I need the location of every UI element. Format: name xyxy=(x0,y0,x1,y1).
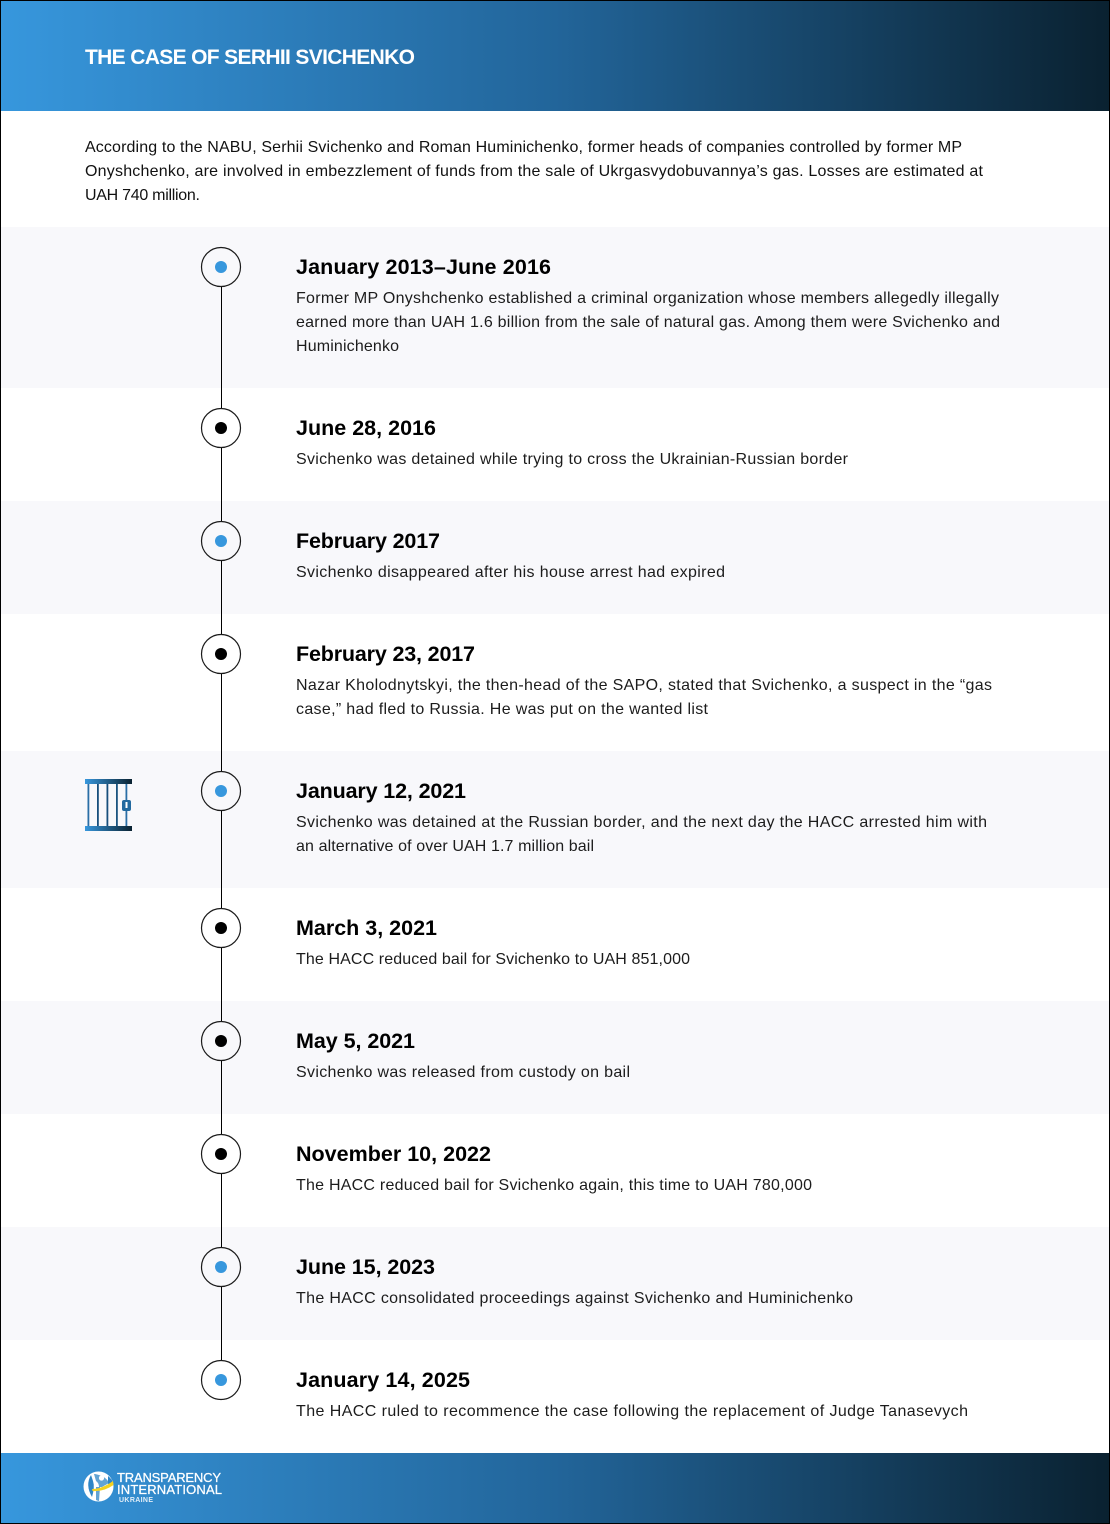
description xyxy=(296,290,1000,355)
marker xyxy=(202,1360,240,1400)
marker xyxy=(202,408,240,448)
description: Huminichenko xyxy=(296,338,399,355)
date heading: March 3, 2021 xyxy=(296,916,437,940)
panel: February 2017 xyxy=(0,501,1110,614)
description: Svichenko was detained at the Russian border, and the next day the HACC arrested him with xyxy=(296,814,987,831)
panel: February 23, 2017 xyxy=(0,614,1110,751)
panel: January 2013–June 2016 xyxy=(0,227,1110,388)
date heading: February 23, 2017 xyxy=(296,642,475,666)
date heading: June 15, 2023 xyxy=(296,1255,435,1279)
description: an alternative of over UAH 1.7 million bail xyxy=(296,838,594,855)
description xyxy=(296,814,987,855)
date heading: November 10, 2022 xyxy=(296,1142,491,1166)
description: The HACC consolidated proceedings against Svichenko and Huminichenko xyxy=(296,1290,853,1307)
date heading: January 2013–June 2016 xyxy=(296,255,551,279)
panel: March 3, 2021 xyxy=(0,888,1110,1001)
date heading: January 12, 2021 xyxy=(296,779,466,803)
marker xyxy=(202,1022,240,1060)
description: Nazar Kholodnytskyi, the then-head of the SAPO, stated that Svichenko, a suspect in the “gas xyxy=(296,677,992,694)
marker xyxy=(202,522,240,560)
logo emblem xyxy=(84,1472,114,1502)
footer banner xyxy=(0,1453,1110,1524)
description: The HACC reduced bail for Svichenko to UAH 851,000 xyxy=(296,951,690,968)
description: Svichenko was detained while trying to cross the Ukrainian-Russian border xyxy=(296,451,849,468)
panel: January 12, 2021 xyxy=(0,751,1110,888)
description xyxy=(296,677,992,718)
marker xyxy=(202,908,240,948)
intro text: Onyshchenko, are involved in embezzlement of funds from the sale of Ukrgasvydobuvannya’s gas. Losses are estimated at xyxy=(85,163,984,180)
date heading: February 2017 xyxy=(296,529,440,553)
marker xyxy=(202,772,240,810)
intro text: According to the NABU, Serhii Svichenko and Roman Huminichenko, former heads of companies controlled by former MP xyxy=(85,139,962,156)
logo wordmark: INTERNATIONAL xyxy=(117,1482,222,1497)
logo wordmark: TRANSPARENCY xyxy=(117,1470,221,1485)
marker xyxy=(202,248,240,286)
description: Svichenko was released from custody on bail xyxy=(296,1064,630,1081)
date heading: June 28, 2016 xyxy=(296,416,436,440)
intro text xyxy=(85,139,984,204)
logo wordmark xyxy=(117,1470,222,1504)
marker xyxy=(202,1248,240,1286)
title: THE CASE OF SERHII SVICHENKO xyxy=(85,46,415,69)
date heading: January 14, 2025 xyxy=(296,1368,470,1392)
panel: June 28, 2016 xyxy=(0,388,1110,501)
panel: January 14, 2025 xyxy=(0,1340,1110,1453)
marker xyxy=(202,634,240,674)
description: case,” had fled to Russia. He was put on the wanted list xyxy=(296,701,709,718)
header banner xyxy=(0,0,1110,111)
date heading: May 5, 2021 xyxy=(296,1029,415,1053)
description: The HACC reduced bail for Svichenko again, this time to UAH 780,000 xyxy=(296,1177,812,1194)
logo: Transparency International Ukraine xyxy=(84,1470,222,1504)
description: earned more than UAH 1.6 billion from the sale of natural gas. Among them were Svichenko and xyxy=(296,314,1000,331)
panel: June 15, 2023 xyxy=(0,1227,1110,1340)
marker xyxy=(202,1134,240,1174)
description: Svichenko disappeared after his house arrest had expired xyxy=(296,564,725,581)
intro text: UAH 740 million. xyxy=(85,187,200,204)
panel: May 5, 2021 xyxy=(0,1001,1110,1114)
icon: prison bars xyxy=(85,779,132,831)
description: Former MP Onyshchenko established a criminal organization whose members allegedly illegally xyxy=(296,290,999,307)
panel: November 10, 2022 xyxy=(0,1114,1110,1227)
logo wordmark: UKRAINE xyxy=(119,1497,153,1504)
timeline connector xyxy=(220,287,222,1360)
description: The HACC ruled to recommence the case following the replacement of Judge Tanasevych xyxy=(296,1403,968,1420)
